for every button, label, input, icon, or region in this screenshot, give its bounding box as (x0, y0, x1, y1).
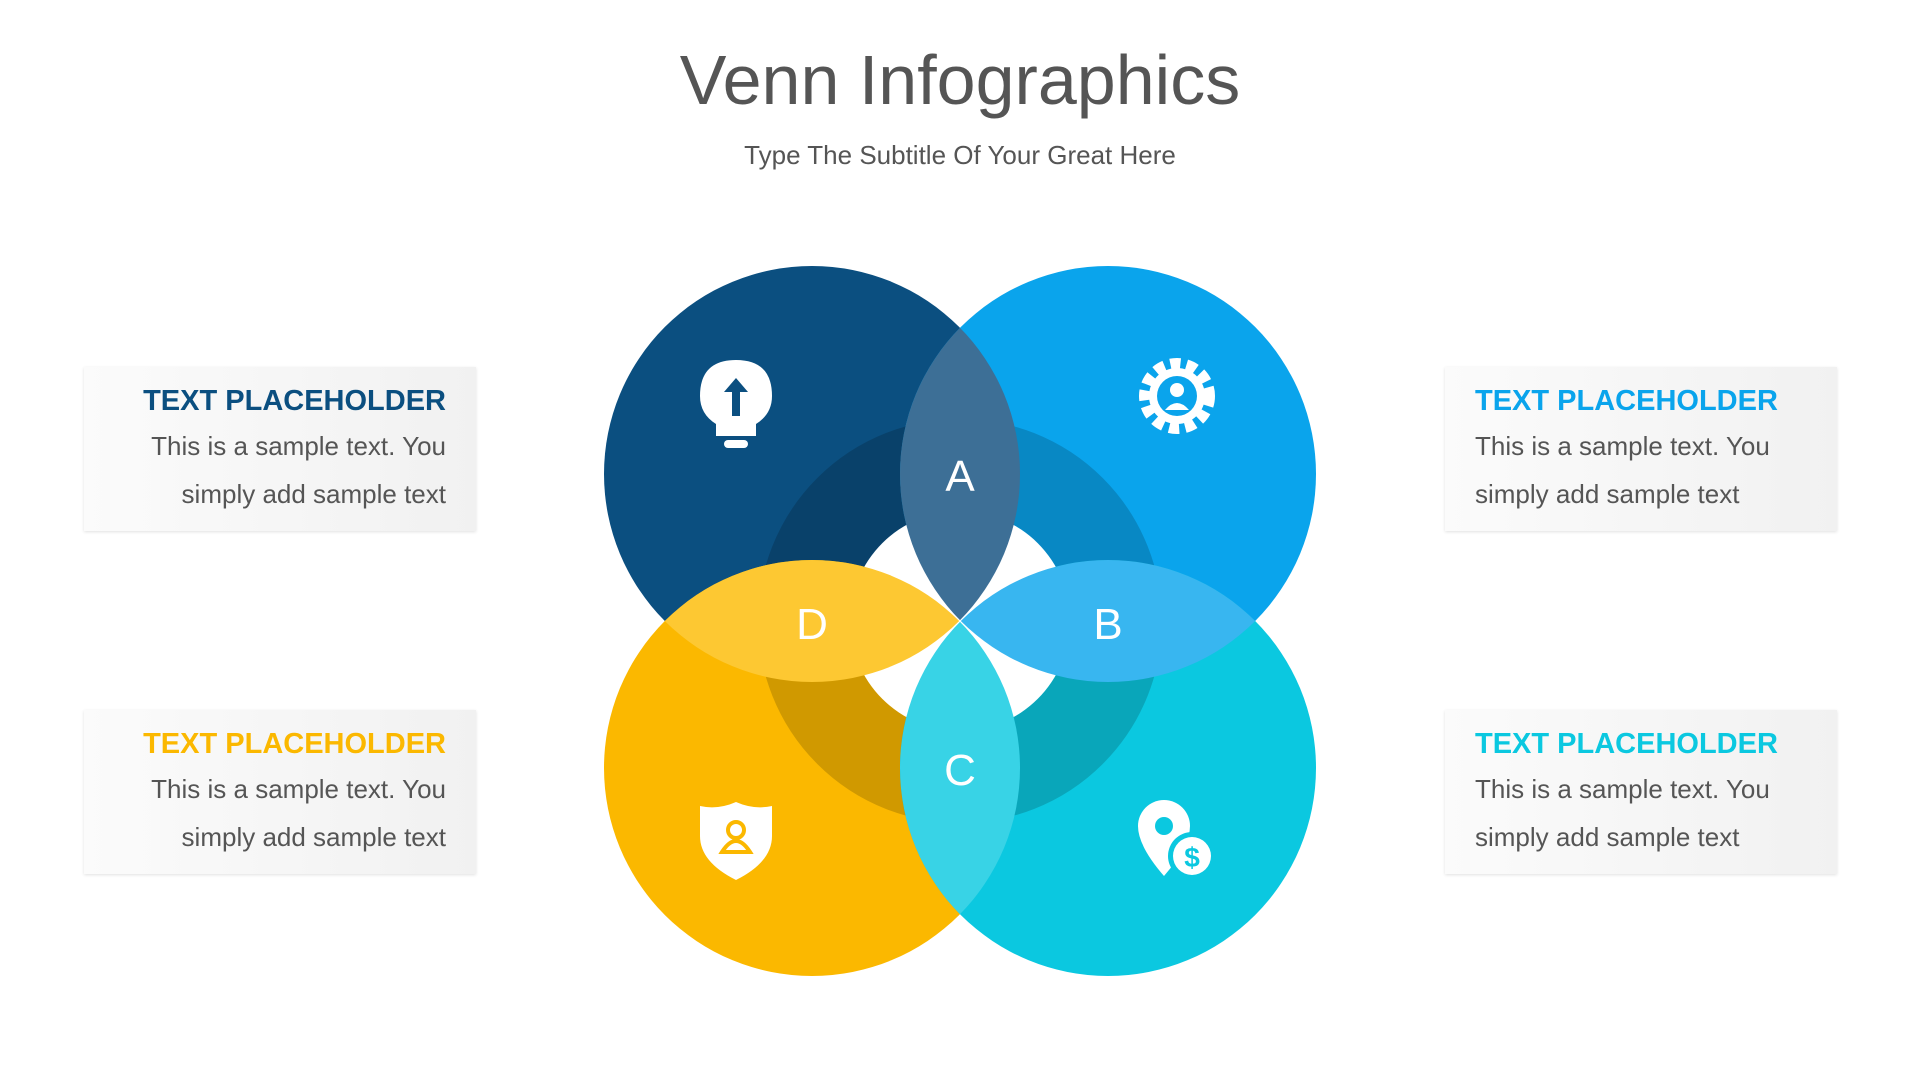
text box: bottom right: This is a sample text. You simply add sample text (1475, 774, 1770, 852)
text box: bottom left: TEXT PLACEHOLDER (143, 728, 446, 760)
text box: top left (84, 367, 476, 531)
subtitle: Type The Subtitle Of Your Great Here (744, 140, 1176, 170)
text box: bottom left: This is a sample text. You simply add sample text (151, 774, 446, 852)
venn diagram (604, 266, 1316, 976)
lens B (960, 560, 1255, 682)
letters: D (796, 600, 828, 649)
lens D (664, 560, 960, 682)
lens C (900, 622, 1020, 914)
lens A (900, 328, 1020, 620)
text box: top right: This is a sample text. You simply add sample text (1475, 431, 1770, 509)
letters: C (944, 746, 976, 795)
icon: gear person (1145, 364, 1209, 428)
text box: bottom right: TEXT PLACEHOLDER (1475, 728, 1778, 760)
text box: top left: TEXT PLACEHOLDER (143, 385, 446, 417)
icon: brain bulb (700, 360, 772, 448)
text box: bottom left (84, 710, 476, 874)
icon: shield person (700, 802, 772, 880)
letters (796, 452, 1123, 795)
text box: top right: TEXT PLACEHOLDER (1475, 385, 1778, 417)
text box: top left: This is a sample text. You simply add sample text (151, 431, 446, 509)
icon: location dollar (1138, 800, 1216, 880)
title: Venn Infographics (680, 41, 1240, 119)
icon: location dollar: $ (1184, 842, 1200, 873)
text box: bottom right (1445, 710, 1837, 874)
letters: B (1093, 600, 1123, 649)
letters: A (945, 452, 975, 501)
text box: top right (1445, 367, 1837, 531)
